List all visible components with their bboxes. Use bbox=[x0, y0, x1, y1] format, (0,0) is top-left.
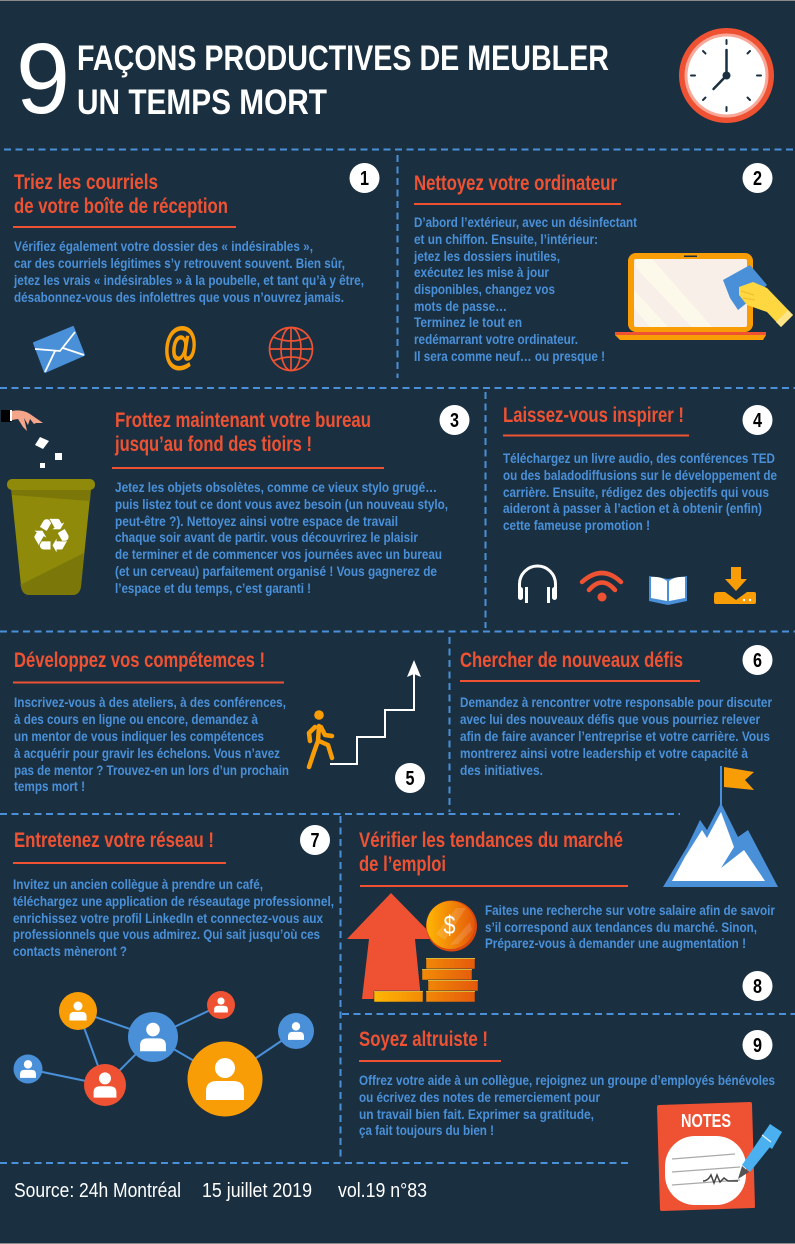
text block 3: chaque soir avant de partir. vous découvrirez le plaisir bbox=[115, 530, 419, 545]
icon: person climbing stairs bbox=[309, 660, 421, 767]
panel: 8 marché de l'emploi bbox=[347, 829, 776, 1002]
text block 9: ou écrivez des notes de remerciement pour bbox=[359, 1090, 601, 1105]
text block 2: redémarrant votre ordinateur. bbox=[414, 332, 578, 347]
text block 3 bbox=[115, 480, 448, 596]
number badge 9: 9 bbox=[753, 1035, 762, 1057]
panel: 5 compétences bbox=[13, 649, 425, 794]
heading 1: Triez les courriels bbox=[14, 171, 158, 194]
icon: rising arrow with coins: $ bbox=[444, 910, 456, 940]
icon: notes and pen bbox=[657, 1102, 782, 1211]
text block 4 bbox=[503, 451, 777, 533]
heading 1: de votre boîte de réception bbox=[14, 195, 228, 218]
text block 2: Il sera comme neuf… ou presque ! bbox=[414, 349, 605, 364]
text block 2: D’abord l’extérieur, avec un désinfectant bbox=[414, 215, 637, 230]
heading 8: Vérifier les tendances du marché bbox=[359, 829, 623, 852]
heading 7: Entretenez votre réseau ! bbox=[14, 829, 214, 852]
text block 5: à des cours en ligne ou encore, demandez à bbox=[14, 712, 258, 727]
footer source: Source: 24h Montréal bbox=[14, 1180, 181, 1202]
panel: 9 altruiste bbox=[359, 1028, 782, 1211]
text block 3: Jetez les objets obsolètes, comme ce vieux stylo grugé… bbox=[115, 480, 437, 495]
number badge 7: 7 bbox=[310, 830, 320, 852]
text block 8: Préparez-vous à demander une augmentation ! bbox=[485, 936, 746, 951]
text block 1: Vérifiez également votre dossier des « indésirables », bbox=[14, 239, 313, 254]
text block 7 bbox=[13, 877, 334, 959]
heading 3: Frottez maintenant votre bureau bbox=[115, 409, 371, 432]
text block 7: contacts mèneront ? bbox=[13, 944, 127, 959]
panel: 2 ordinateur bbox=[413, 163, 793, 364]
text block 4: cette fameuse promotion ! bbox=[503, 518, 650, 533]
icon: recycling bin: ♻ bbox=[30, 509, 73, 564]
text block 3: puis listez tout ce dont vous avez besoin (un nouveau stylo, bbox=[115, 497, 448, 512]
panel: 6 défis bbox=[460, 645, 778, 887]
text block 2: mots de passe… bbox=[414, 299, 507, 314]
heading 8 bbox=[359, 829, 628, 886]
icon: envelope bbox=[34, 327, 84, 372]
icon: hand dropping paper bbox=[1, 410, 62, 468]
text block 8 bbox=[485, 903, 776, 951]
number badge 2 bbox=[742, 163, 772, 193]
text block 9: un travail bien fait. Exprimer sa gratitude, bbox=[359, 1107, 594, 1122]
text block 5: temps mort ! bbox=[14, 779, 85, 794]
panel: 4 inspiration bbox=[503, 404, 777, 605]
icon: rising arrow with coins bbox=[347, 893, 478, 1002]
text block 1: car des courriels légitimes s’y retrouvent souvent. Bien sûr, bbox=[14, 256, 345, 271]
icon: wifi bbox=[582, 573, 621, 602]
heading 6: Chercher de nouveaux défis bbox=[460, 649, 683, 672]
number badge 4: 4 bbox=[753, 410, 763, 432]
text block 1: désabonnez-vous des infolettres que vous n’ouvrez jamais. bbox=[14, 290, 344, 305]
text block 3: l’espace et du temps, c’est garanti ! bbox=[115, 581, 311, 596]
number badge 2: 2 bbox=[753, 168, 762, 190]
text block 2 bbox=[413, 215, 637, 364]
number badge 3: 3 bbox=[450, 410, 459, 432]
heading 8: de l’emploi bbox=[359, 853, 446, 876]
number badge 6: 6 bbox=[753, 650, 762, 672]
network diagram bbox=[14, 991, 314, 1116]
title bbox=[16, 23, 609, 135]
text block 5: à acquérir pour gravir les échelons. Vous n’avez bbox=[14, 746, 280, 761]
text block 7: enrichissez votre profil LinkedIn et connectez-vous aux bbox=[13, 911, 323, 926]
icon: notes and pen: NOTES bbox=[681, 1111, 731, 1131]
number badge 1: 1 bbox=[360, 168, 369, 190]
title: UN TEMPS MORT bbox=[77, 83, 327, 122]
icon: clock bbox=[679, 28, 774, 123]
heading 3 bbox=[112, 409, 384, 468]
icon: laptop being wiped bbox=[615, 253, 793, 340]
panel: 3 bureau bbox=[1, 405, 470, 596]
heading 5: Développez vos compétemces ! bbox=[14, 649, 265, 672]
number badge 5 bbox=[395, 763, 425, 793]
text block 7: Invitez un ancien collègue à prendre un café, bbox=[13, 877, 263, 892]
footer source bbox=[14, 1180, 427, 1202]
number badge 5: 5 bbox=[406, 768, 414, 790]
icon: open book bbox=[649, 576, 687, 605]
heading 4: Laissez-vous inspirer ! bbox=[503, 404, 684, 427]
text block 2: disponibles, changez vos bbox=[414, 282, 555, 297]
heading 9: Soyez altruiste ! bbox=[359, 1028, 488, 1051]
text block 2: jetez les dossiers inutiles, bbox=[413, 249, 560, 264]
text block 9: ça fait toujours du bien ! bbox=[359, 1123, 494, 1138]
title: 9 bbox=[16, 23, 70, 135]
text block 7: téléchargez une application de réseautage professionnel, bbox=[13, 894, 334, 909]
text block 3: (et un cerveau) parfaitement organisé ! Vous gagnerez de bbox=[115, 564, 437, 579]
text block 5: un mentor de vous indiquer les compétences bbox=[14, 729, 264, 744]
text block 2: Terminez le tout en bbox=[414, 315, 522, 330]
icon: recycling bin bbox=[7, 479, 95, 595]
panel: 7 réseau bbox=[13, 825, 334, 1116]
text block 1 bbox=[13, 239, 364, 305]
heading 3: jusqu’au fond des tioirs ! bbox=[114, 433, 312, 456]
icon: at sign: @ bbox=[164, 317, 198, 373]
number badge 9 bbox=[742, 1030, 772, 1060]
text block 6: montrerez ainsi votre leadership et votre capacité à bbox=[460, 746, 748, 761]
text block 7: professionnels que vous admirez. Qui sait jusqu’où ces bbox=[13, 927, 320, 942]
number badge 8 bbox=[742, 971, 772, 1001]
number badge 6 bbox=[742, 645, 772, 675]
icon: globe bbox=[270, 328, 312, 370]
number badge 3 bbox=[440, 405, 470, 435]
text block 2: et un chiffon. Ensuite, l’intérieur: bbox=[414, 232, 598, 247]
number badge 7 bbox=[300, 825, 330, 855]
icon: headphones bbox=[518, 566, 557, 603]
number badge 1 bbox=[350, 163, 380, 193]
title: FAÇONS PRODUCTIVES DE MEUBLER bbox=[77, 39, 609, 78]
text block 5: Inscrivez-vous à des ateliers, à des conférences, bbox=[14, 695, 286, 710]
text block 2: exécutez les mise à jour bbox=[414, 265, 550, 280]
number badge 4 bbox=[742, 405, 772, 435]
icon: mountain with flag bbox=[663, 766, 778, 887]
heading 1 bbox=[13, 171, 236, 227]
panel: 1 courriels bbox=[13, 163, 380, 373]
footer source: 15 juillet 2019 bbox=[202, 1180, 312, 1202]
text block 5 bbox=[14, 695, 289, 794]
footer source: vol.19 n°83 bbox=[338, 1180, 427, 1202]
number badge 8: 8 bbox=[753, 976, 762, 998]
text block 1: jetez les vrais « indésirables » à la poubelle, et tant qu’à y être, bbox=[13, 273, 364, 288]
heading 2: Nettoyez votre ordinateur bbox=[414, 172, 617, 195]
text block 3: de terminer et de commencer vos journées avec un bureau bbox=[115, 547, 442, 562]
text block 6: des initiatives. bbox=[460, 763, 543, 778]
text block 5: pas de mentor ? Trouvez-en un lors d’un prochain bbox=[14, 763, 289, 778]
text block 3: peut-être ?). Nettoyez ainsi votre espace de travail bbox=[115, 514, 398, 529]
text block 9 bbox=[359, 1073, 775, 1138]
icon: download bbox=[714, 567, 756, 604]
text block 6 bbox=[460, 695, 773, 778]
